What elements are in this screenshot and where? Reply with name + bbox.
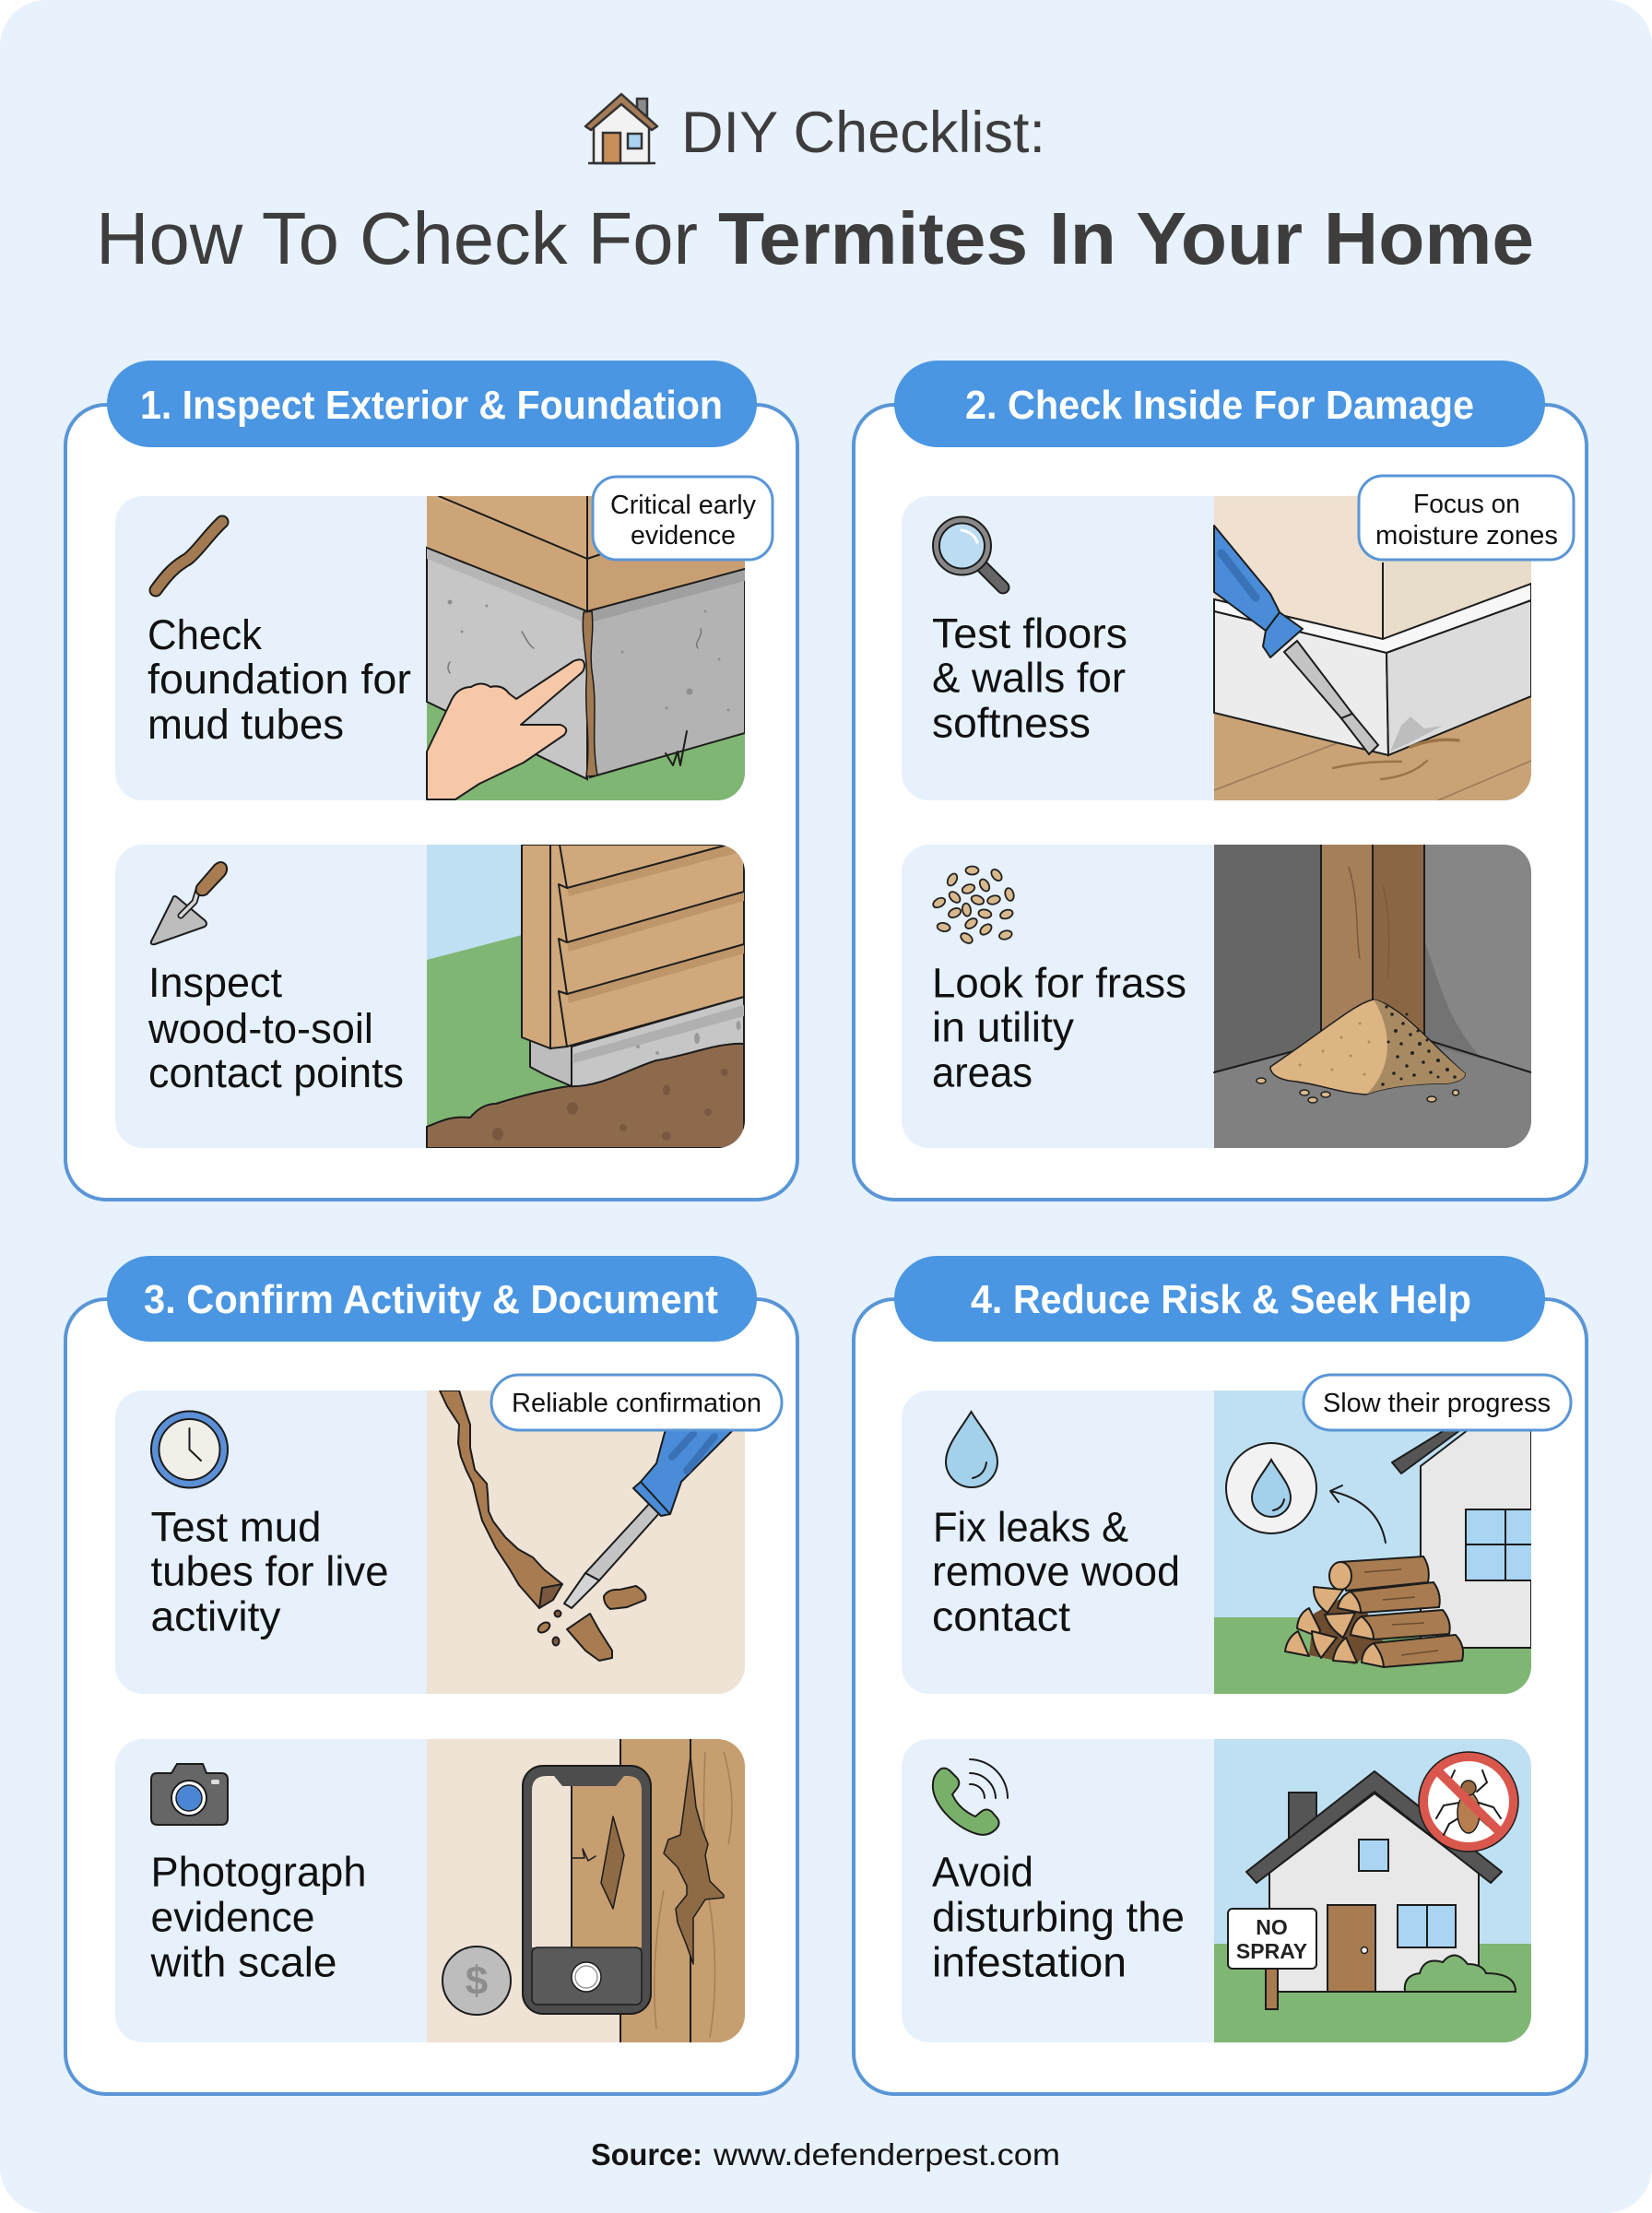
title line 2: How To Check For [96,197,698,279]
heading pill: 1. Inspect Exterior & Foundation [140,383,723,428]
row: frass in utility areas [902,845,1531,1148]
panel frame [854,405,1587,1200]
callout: Focus on moisture zones [1359,476,1574,560]
title line 1: DIY Checklist: [681,101,1045,165]
source line [591,2137,1060,2172]
icon: mud tube [156,522,222,590]
heading pill [107,361,757,447]
callout: Critical early evidence: Critical early [610,491,756,520]
illustration: woodpile beside house [1214,1391,1540,1694]
icon: frass pellets [931,867,1015,945]
row text [932,1848,1185,1986]
callout: Critical early evidence: evidence [631,521,736,550]
illustration: finger pointing at mud tube on foundation [427,496,745,800]
icon: water drop [946,1412,997,1487]
row background [115,1391,745,1694]
row text: wood-to-soil [148,1005,373,1052]
row: wood-to-soil contact [115,845,745,1148]
row text: Inspect [148,959,282,1006]
sign: no spray [1228,1909,1316,1969]
sign: no spray: NO [1256,1915,1288,1939]
sign: no spray: SPRAY [1236,1939,1307,1963]
row text: infestation [932,1938,1127,1986]
heading pill: 4. Reduce Risk & Seek Help [971,1277,1471,1322]
row text: Check [148,611,262,658]
row text: Fix leaks & [933,1503,1128,1551]
illustration: house with no spray sign and no-termite symbol [1214,1739,1531,2042]
row text: Avoid [932,1848,1033,1896]
row background [902,496,1531,800]
source line: www.defenderpest.com [713,2137,1060,2172]
icon: clock [151,1411,228,1488]
row text [932,1503,1180,1639]
panel: 1. Inspect Exterior & Foundation [65,361,797,1200]
row: test floors and walls [902,476,1574,800]
row text [151,1503,389,1639]
heading pill: 2. Check Inside For Damage [965,383,1474,428]
row text: evidence [151,1894,315,1940]
icon: coin: $ [466,1959,488,2004]
illustration: frass pile at wooden post [1214,845,1531,1148]
callout: Focus on moisture zones: Focus on [1413,490,1520,519]
icon: coin [442,1947,511,2015]
source line: Source: [591,2137,702,2172]
title [96,94,1534,279]
row text: mud tubes [148,701,344,748]
row text [148,611,411,748]
row text: in utility [932,1003,1075,1051]
row text [148,959,404,1096]
row text: remove wood [932,1547,1180,1595]
row background [115,496,745,800]
row: avoid disturbing [902,1739,1531,2042]
row background [902,845,1531,1148]
icon: phone [523,1766,651,2014]
row: test mud tubes [115,1375,782,1694]
heading pill [107,1256,757,1342]
icon: no termites symbol [1419,1752,1518,1852]
row background [115,845,745,1148]
illustration: phone photographing damaged wood with coin [427,1739,745,2042]
row text: disturbing the [932,1894,1185,1940]
panel: 2. Check Inside For Damage [854,361,1587,1200]
row text [932,610,1127,747]
row text: contact [932,1593,1071,1639]
row text: Test mud [151,1503,321,1551]
row text: Photograph [151,1848,367,1896]
icon: magnifying glass [933,516,1003,587]
row text: foundation for [148,656,411,703]
callout: Focus on moisture zones: moisture zones [1375,521,1558,550]
row text [149,1848,367,1986]
panel frame [65,405,797,1200]
callout: Reliable confirmation: Reliable confirmation [512,1389,761,1418]
row text: tubes for live [151,1547,389,1595]
row text: softness [932,699,1091,747]
icon: house [585,94,657,163]
row: fix leaks [902,1375,1571,1694]
heading pill [894,1256,1545,1342]
illustration: screwdriver testing baseboard [1214,496,1531,800]
callout: Reliable confirmation [491,1375,782,1430]
illustration: siding touching soil [427,845,745,1148]
heading pill [894,361,1545,447]
row text: Test floors [932,610,1127,657]
title line 2 bold: Termites In Your Home [718,197,1534,279]
icon: camera [151,1764,228,1825]
row: photograph evidence [115,1739,745,2042]
row text: with scale [149,1938,337,1986]
icon: trowel [151,862,227,944]
row text: activity [151,1593,281,1639]
panel frame [65,1299,797,2094]
panel frame [854,1299,1587,2094]
icon: phone call [933,1759,1008,1835]
row text [932,959,1186,1095]
row text: & walls for [932,655,1126,701]
row background [902,1391,1531,1694]
panel: 3. Confirm Activity & Document [65,1256,797,2094]
heading pill: 3. Confirm Activity & Document [144,1277,718,1322]
row background [115,1739,745,2042]
row text: Look for frass [932,959,1186,1007]
illustration: screwdriver breaking mud tube [427,1391,745,1694]
callout: Slow their progress: Slow their progress [1323,1389,1551,1418]
callout: Critical early evidence [593,477,773,560]
row text: areas [932,1049,1032,1095]
panel: 4. Reduce Risk & Seek Help [854,1256,1587,2094]
row: foundation mud tubes [115,477,773,800]
row text: contact points [148,1049,404,1096]
callout: Slow their progress [1304,1375,1571,1430]
row background [902,1739,1531,2042]
